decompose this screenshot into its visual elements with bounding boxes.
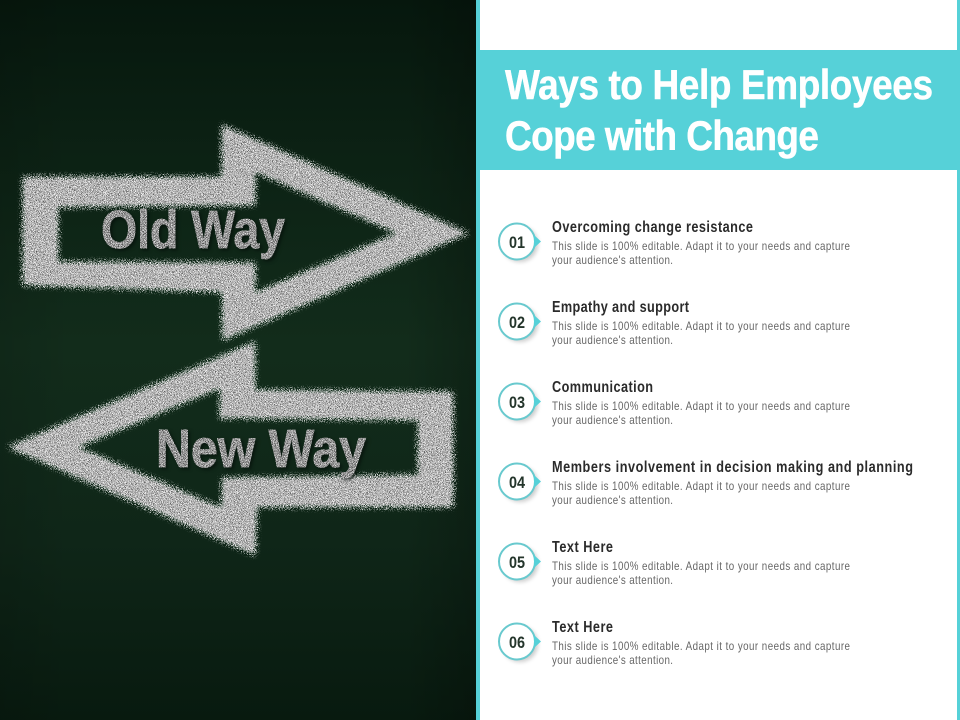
badge 03: 03 — [509, 394, 525, 412]
text 04: your audience's attention. — [552, 494, 673, 507]
text 04 — [552, 459, 913, 507]
label: New Way: New Way — [156, 419, 366, 479]
badge 05: 05 — [509, 554, 525, 572]
chalkboard photo — [0, 0, 476, 720]
text 06: your audience's attention. — [552, 654, 673, 667]
badge 04: 04 — [509, 474, 525, 492]
text 03 — [552, 379, 853, 427]
text 05: This slide is 100% editable. Adapt it to your needs and capture — [552, 560, 850, 573]
arrow: Old Way — [23, 125, 468, 340]
text 05 — [552, 539, 853, 587]
text 05: your audience's attention. — [552, 574, 673, 587]
text 03: Communication — [552, 379, 653, 396]
text 01: your audience's attention. — [552, 254, 673, 267]
text 04: This slide is 100% editable. Adapt it to your needs and capture — [552, 480, 850, 493]
text 01 — [552, 219, 853, 267]
badge 06: 06 — [509, 634, 525, 652]
arrow: New Way — [8, 342, 453, 555]
text 06 — [552, 619, 853, 667]
badge 06 — [499, 624, 541, 662]
item 06 — [499, 619, 853, 667]
text 01: Overcoming change resistance — [552, 219, 753, 236]
badge 04 — [499, 464, 541, 502]
label: Old Way: Old Way — [101, 200, 285, 260]
text 03: your audience's attention. — [552, 414, 673, 427]
text 05: Text Here — [552, 539, 613, 556]
panel frame — [476, 0, 960, 720]
text 06: This slide is 100% editable. Adapt it to your needs and capture — [552, 640, 850, 653]
title band — [476, 50, 960, 170]
item 02 — [499, 299, 853, 347]
text 03: This slide is 100% editable. Adapt it to your needs and capture — [552, 400, 850, 413]
text 02: Empathy and support — [552, 299, 689, 316]
text 02: This slide is 100% editable. Adapt it to your needs and capture — [552, 320, 850, 333]
item 01 — [499, 219, 853, 267]
badge 03 — [499, 384, 541, 422]
text 02 — [552, 299, 853, 347]
item 03 — [499, 379, 853, 427]
item 05 — [499, 539, 853, 587]
text 01: This slide is 100% editable. Adapt it to your needs and capture — [552, 240, 850, 253]
text 06: Text Here — [552, 619, 613, 636]
title: Ways to Help Employees — [505, 62, 933, 109]
text 02: your audience's attention. — [552, 334, 673, 347]
text 04: Members involvement in decision making and planning — [552, 459, 913, 476]
badge 01: 01 — [509, 234, 525, 252]
item 04 — [499, 459, 913, 507]
badge 02 — [499, 304, 541, 342]
title: Cope with Change — [505, 113, 819, 160]
badge 02: 02 — [509, 314, 525, 332]
badge 05 — [499, 544, 541, 582]
badge 01 — [499, 224, 541, 262]
